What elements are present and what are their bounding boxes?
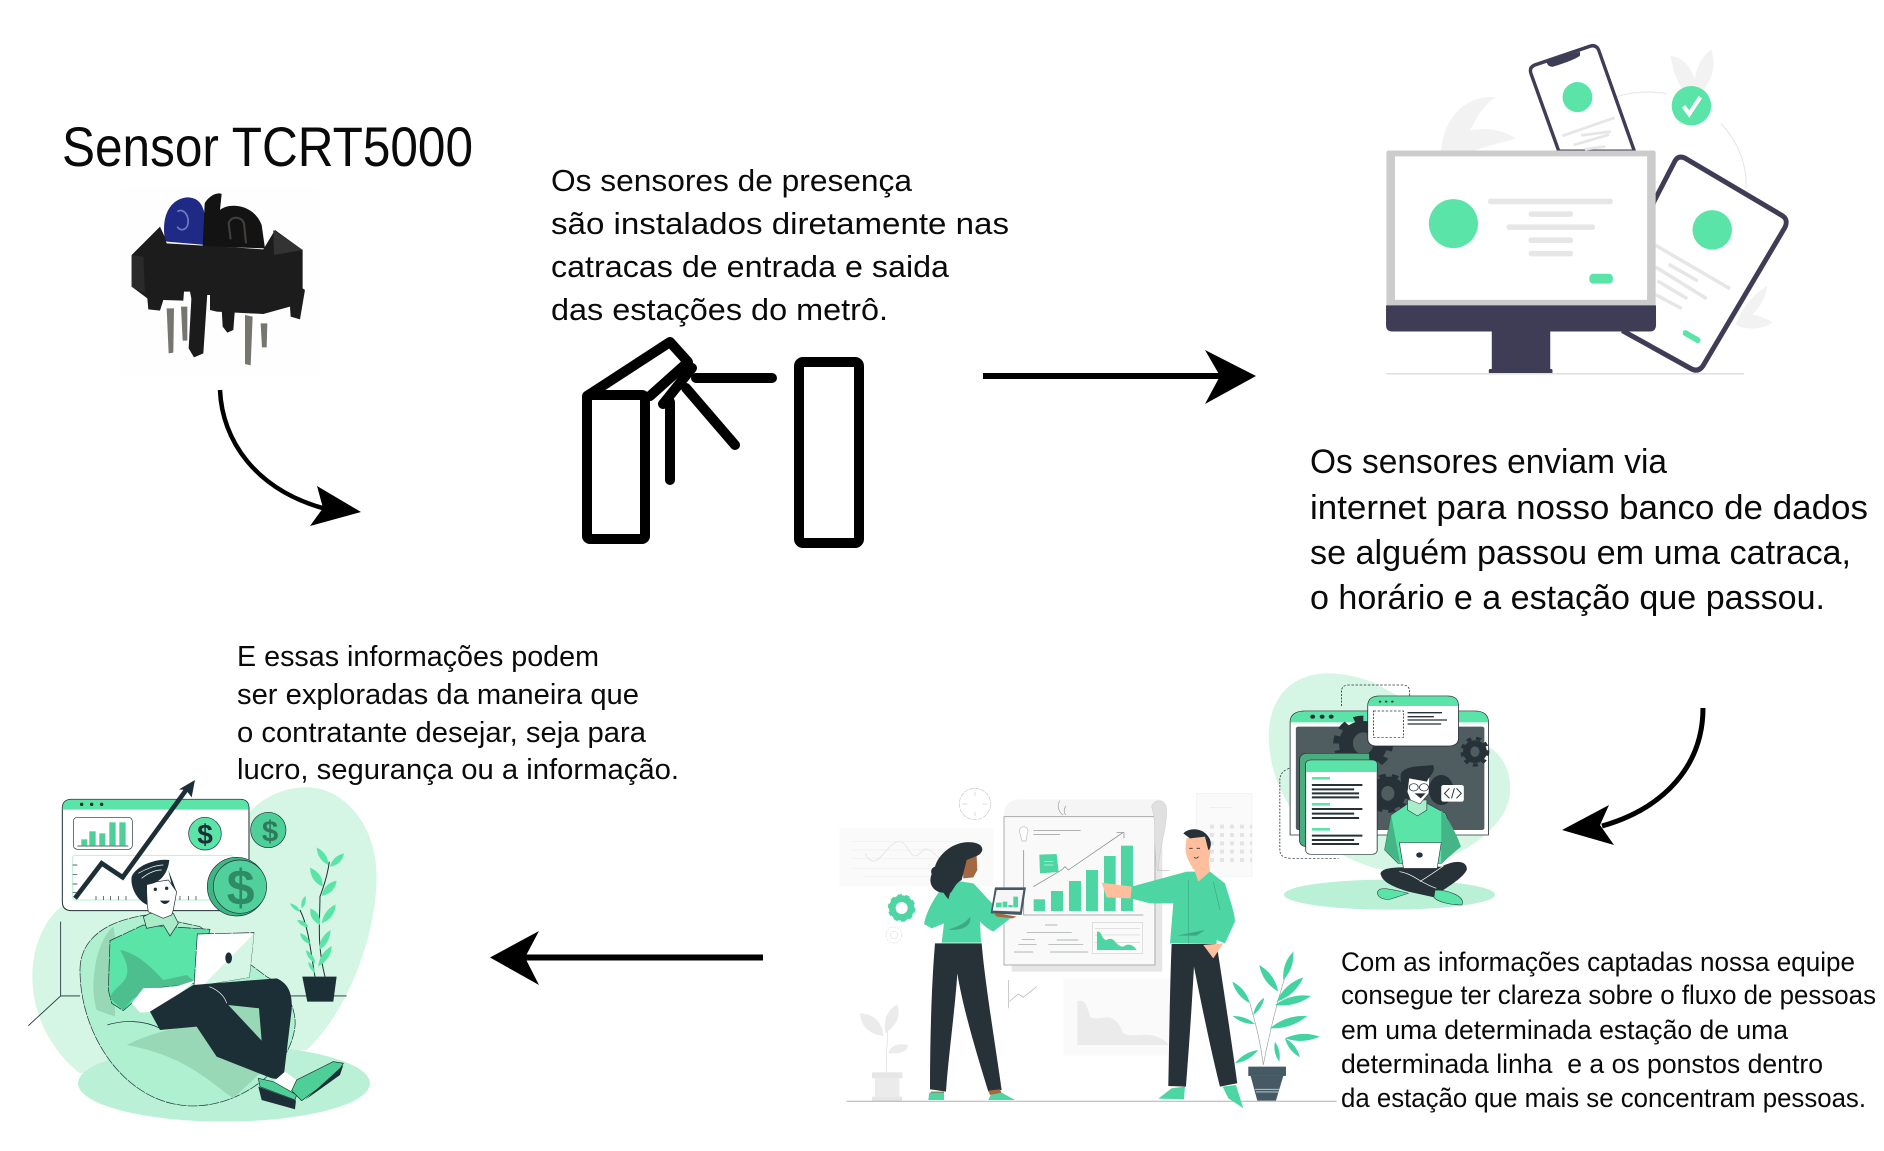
text block: sensores enviam bbox=[1310, 443, 1868, 617]
clock bbox=[959, 788, 991, 820]
code badge bbox=[1441, 785, 1464, 802]
text block: sensores enviam: internet para nosso banco de dados bbox=[1310, 489, 1868, 527]
legs bbox=[150, 978, 292, 1080]
dashboard window bbox=[62, 780, 249, 911]
line chart frame bbox=[73, 855, 233, 900]
dark centre pin bbox=[189, 293, 235, 357]
sensor body bbox=[132, 227, 305, 319]
illustration: developer with windows bbox=[1269, 673, 1510, 910]
man figure bbox=[1102, 829, 1243, 1108]
arrow: turnstile to devices bbox=[983, 350, 1256, 404]
developer figure bbox=[1377, 765, 1467, 905]
plant bbox=[290, 847, 344, 1002]
mini area chart bbox=[1092, 922, 1143, 953]
text block: sensores enviam: o horário e a estação que passou. bbox=[1310, 579, 1825, 617]
text block: informações captadas: consegue ter clareza sobre o fluxo de pessoas bbox=[1341, 980, 1876, 1010]
bar chart bbox=[1034, 846, 1133, 911]
man torso bbox=[108, 860, 210, 1013]
woman figure bbox=[924, 842, 1026, 1100]
room lines bbox=[28, 922, 347, 1026]
arrow: team to investor bbox=[490, 931, 763, 985]
pins bbox=[167, 307, 267, 365]
head bbox=[147, 880, 177, 918]
icon: TCRT5000 sensor component bbox=[122, 187, 318, 377]
illustration: monitor, phone and tablet bbox=[1386, 46, 1786, 375]
illustration: man with laptop and profits bbox=[28, 780, 377, 1122]
background leaves bbox=[1441, 50, 1773, 329]
org chart bbox=[1014, 925, 1088, 952]
text block: informações captadas: determinada linha e a os ponstos dentro bbox=[1341, 1049, 1823, 1079]
green gear bbox=[886, 896, 914, 943]
sneakers bbox=[258, 1062, 343, 1109]
dollar coins: $ bbox=[227, 860, 255, 916]
mint blob bbox=[1269, 673, 1510, 869]
ground line bbox=[847, 1100, 1337, 1103]
right faint paper with dots bbox=[1197, 793, 1252, 877]
monitor bbox=[1386, 150, 1744, 375]
text block: sensores de presença: são instalados diretamente nas bbox=[551, 206, 1009, 241]
text block: essas informações: o contratante desejar, seja para bbox=[237, 717, 647, 749]
dashed outlines bbox=[1280, 685, 1410, 858]
tablet bbox=[1624, 157, 1786, 370]
phone bbox=[1530, 46, 1634, 151]
dollar coins: $ bbox=[262, 815, 278, 848]
text block: sensores de presença: catracas de entrada e saida bbox=[551, 249, 950, 284]
lower faint area panel bbox=[1063, 978, 1170, 1056]
main window with gears bbox=[1290, 711, 1488, 835]
presentation board bbox=[1004, 799, 1170, 972]
mini bar chart bbox=[73, 817, 132, 849]
text block: informações captadas bbox=[1341, 947, 1876, 1113]
grey plant bbox=[860, 1004, 908, 1102]
arrow: sensor to turnstile bbox=[220, 390, 361, 526]
text block: sensores enviam: Os sensores enviam via bbox=[1310, 443, 1667, 481]
text block: essas informações bbox=[237, 641, 679, 786]
floor ellipse bbox=[78, 1045, 370, 1122]
illustration: team presenting chart bbox=[839, 788, 1337, 1108]
icon: turnstile bbox=[587, 342, 859, 543]
text block: sensores de presença: das estações do metrô. bbox=[551, 292, 888, 327]
text block: essas informações: ser exploradas da maneira que bbox=[237, 679, 639, 711]
text block: essas informações: E essas informações podem bbox=[237, 641, 599, 673]
small window bbox=[1368, 696, 1458, 746]
text block: sensores de presença: Os sensores de presença bbox=[551, 163, 913, 198]
dollar coins: $ bbox=[197, 819, 213, 850]
text block: essas informações: lucro, segurança ou a informação. bbox=[237, 754, 679, 786]
mint blob bbox=[32, 787, 377, 1073]
check badge bbox=[1672, 86, 1711, 126]
black detector dome bbox=[203, 193, 265, 248]
text block: sensores de presença bbox=[551, 163, 1009, 327]
document panel bbox=[1300, 753, 1377, 854]
text block: sensores enviam: se alguém passou em uma catraca, bbox=[1310, 534, 1851, 572]
arrow: devices to team bbox=[1562, 708, 1703, 845]
text block: informações captadas: em uma determinada estação de uma bbox=[1341, 1015, 1788, 1045]
small trend sketch bbox=[1008, 980, 1037, 1008]
blue LED dome bbox=[164, 197, 206, 245]
text block: informações captadas: da estação que mais se concentram pessoas. bbox=[1341, 1083, 1866, 1113]
laptop bbox=[194, 933, 254, 987]
trend arrow bbox=[75, 788, 187, 898]
green potted plant bbox=[1232, 952, 1320, 1101]
title: Sensor TCRT5000: Sensor TCRT5000 bbox=[62, 115, 473, 178]
bean bag bbox=[80, 915, 295, 1106]
ground ellipse bbox=[1284, 880, 1495, 910]
faint circle arcs bbox=[1617, 92, 1746, 188]
faint wave panel bbox=[839, 828, 993, 886]
text block: informações captadas: Com as informações captadas nossa equipe bbox=[1341, 947, 1855, 977]
dollar coins bbox=[189, 812, 286, 916]
